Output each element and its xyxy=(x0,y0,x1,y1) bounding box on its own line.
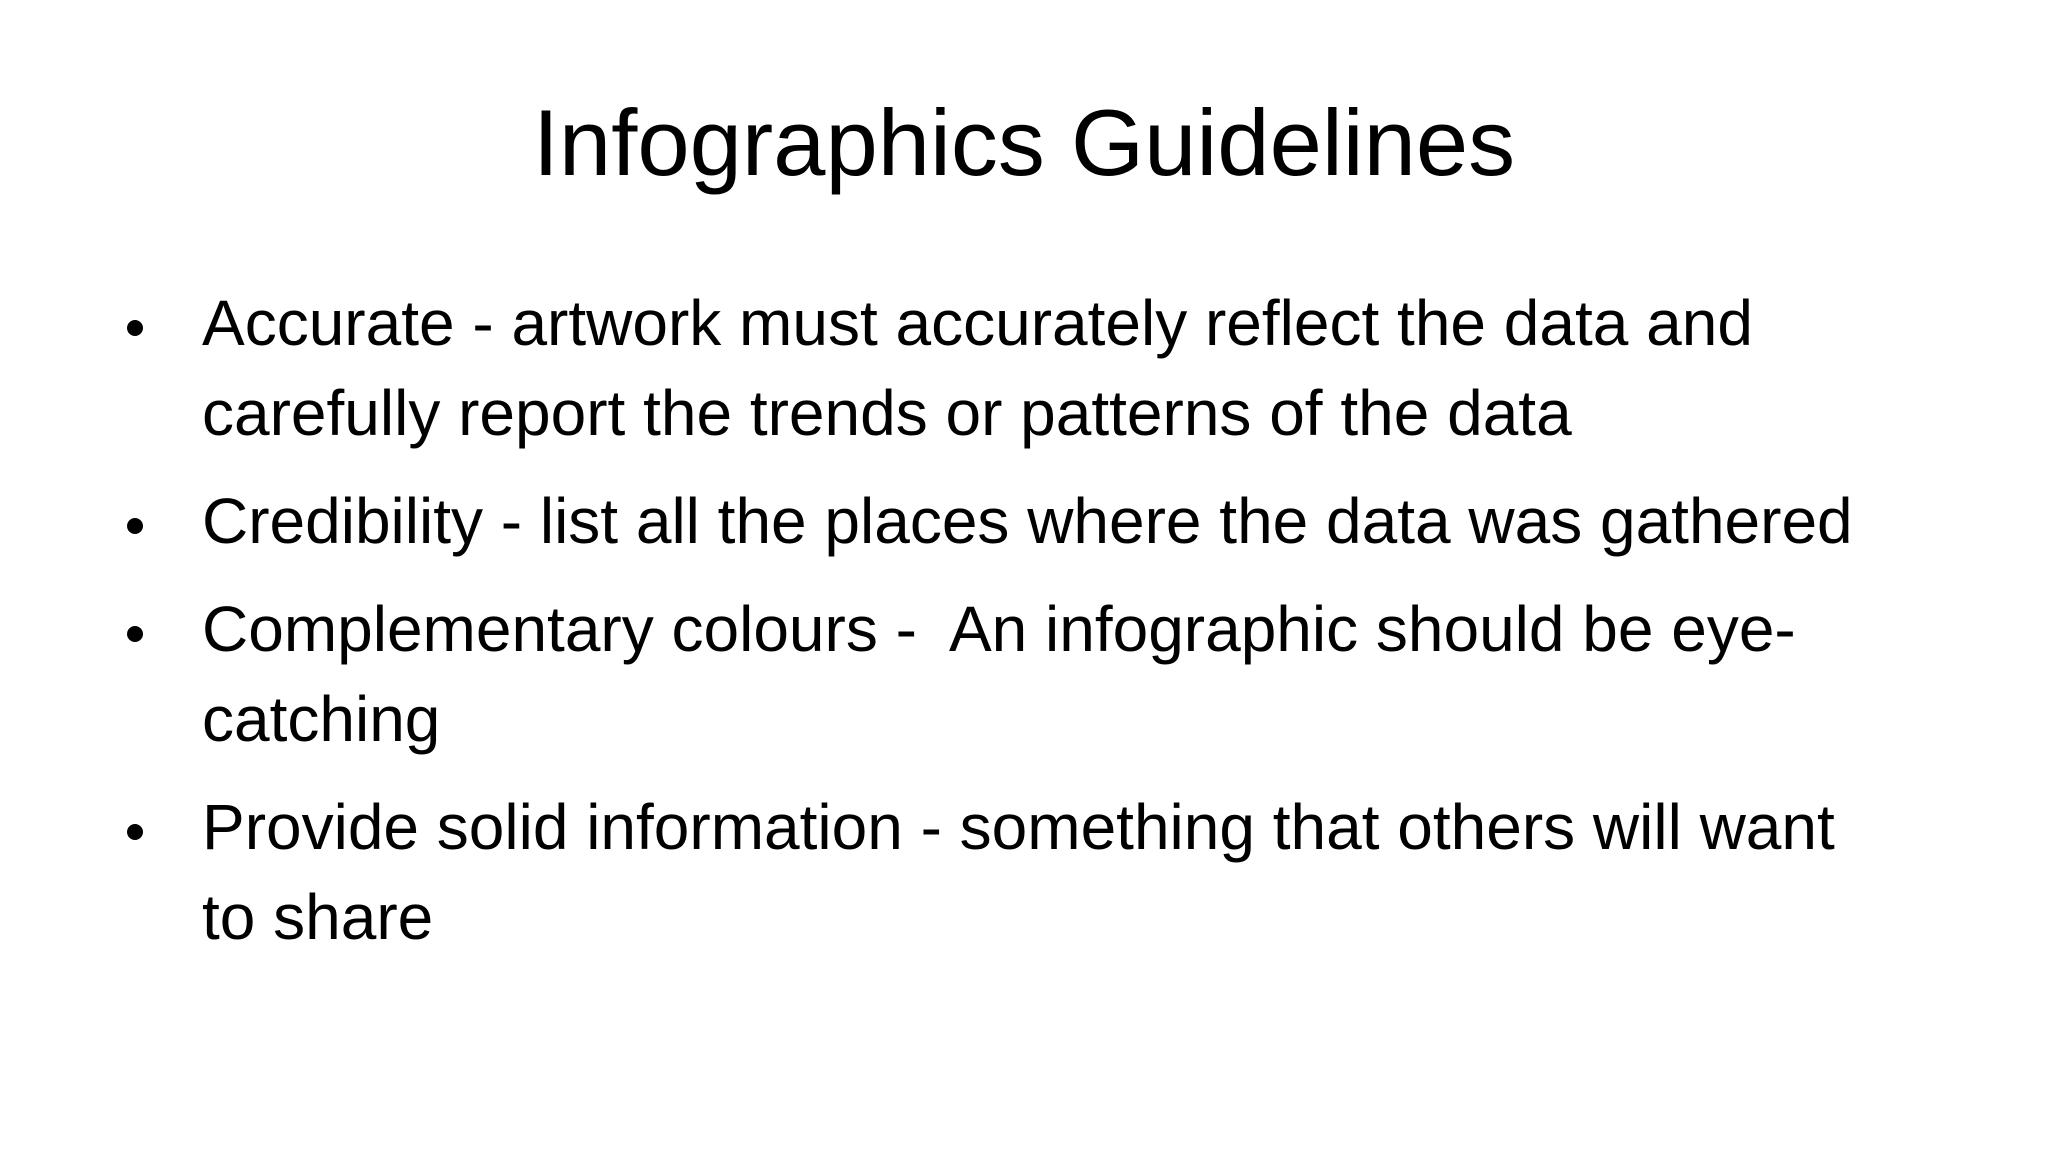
title: Infographics Guidelines xyxy=(533,90,1515,195)
bullet: complementary colours: Complementary colours - An infographic should be eye- xyxy=(202,593,1796,665)
bullet: accurate: Accurate - artwork must accurately reflect the data and xyxy=(202,287,1753,359)
bullet: solid information: to share xyxy=(202,881,433,953)
bullet: accurate: carefully report the trends or patterns of the data xyxy=(202,377,1572,449)
bullet: solid information: Provide solid information - something that others will want xyxy=(202,791,1835,863)
bullet: complementary colours: catching xyxy=(202,683,440,755)
bullet: complementary colours xyxy=(127,593,1796,755)
bullet: credibility: Credibility - list all the places where the data was gathered xyxy=(202,485,1853,557)
bullet: solid information xyxy=(127,791,1835,953)
bullet: accurate xyxy=(127,287,1753,449)
bullet list xyxy=(127,287,1853,953)
